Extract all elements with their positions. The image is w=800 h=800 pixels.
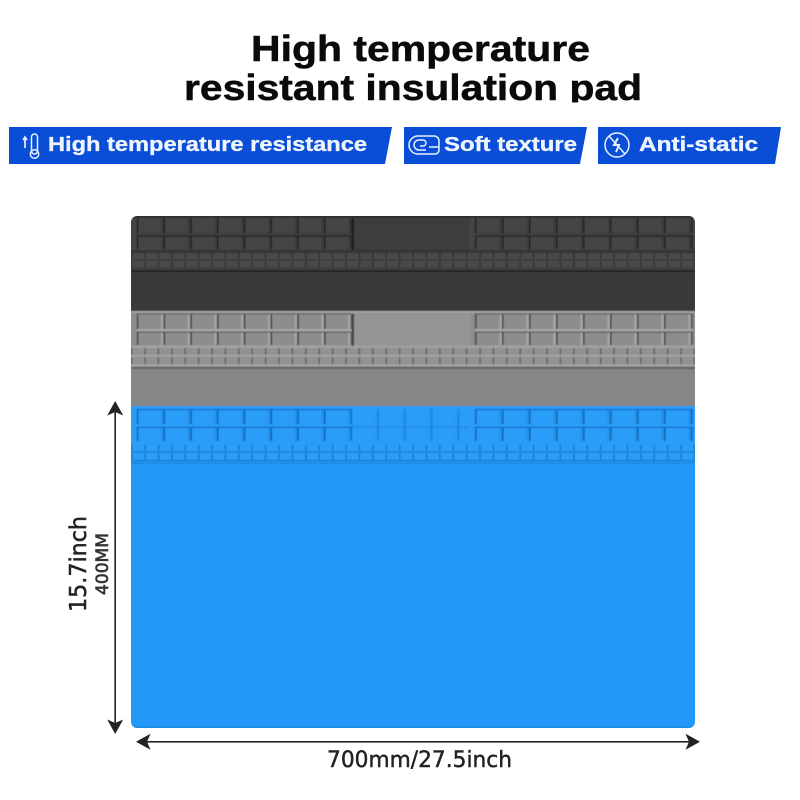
title: High temperature bbox=[251, 28, 590, 69]
grid: blue left cells bbox=[137, 409, 352, 441]
icon: anti-static bbox=[605, 133, 629, 157]
grid: grey left cells bbox=[137, 313, 354, 346]
panel: blue pad bbox=[125, 406, 701, 736]
banner: high temperature resistance: High temperature resistance bbox=[48, 133, 367, 156]
small grid: grey bbox=[131, 348, 695, 367]
banner: soft texture bbox=[404, 127, 587, 164]
grid: black right cells bbox=[475, 218, 693, 249]
center recess: grey bbox=[354, 314, 355, 344]
small grid: black bbox=[131, 253, 695, 270]
grid: black left cells bbox=[137, 218, 354, 250]
banner: anti-static bbox=[598, 127, 781, 164]
title bbox=[170, 28, 660, 116]
grid: blue center faint cells bbox=[352, 409, 470, 441]
grid: grey right cells bbox=[475, 313, 693, 345]
panel: pad stack bbox=[125, 210, 701, 736]
label: height in inches: 15.7inch bbox=[66, 516, 92, 612]
banner: soft texture: Soft texture bbox=[444, 133, 577, 156]
label: height in mm: 400MM bbox=[93, 533, 113, 595]
panel: grey pad bbox=[125, 311, 701, 406]
title: resistant insulation pad bbox=[184, 67, 642, 108]
icon: thermometer bbox=[23, 134, 39, 158]
label: width: 700mm/27.5inch bbox=[327, 748, 512, 773]
panel: black pad bbox=[125, 210, 701, 312]
banner: high temperature resistance bbox=[9, 127, 392, 164]
icon: rolled mat bbox=[409, 136, 439, 154]
small grid: blue bbox=[131, 445, 695, 462]
center recess: black bbox=[354, 218, 470, 250]
banner: anti-static: Anti-static bbox=[639, 133, 758, 156]
arrow: width bbox=[136, 734, 700, 750]
grid: blue right cells bbox=[475, 409, 693, 441]
arrow: height bbox=[107, 401, 123, 734]
